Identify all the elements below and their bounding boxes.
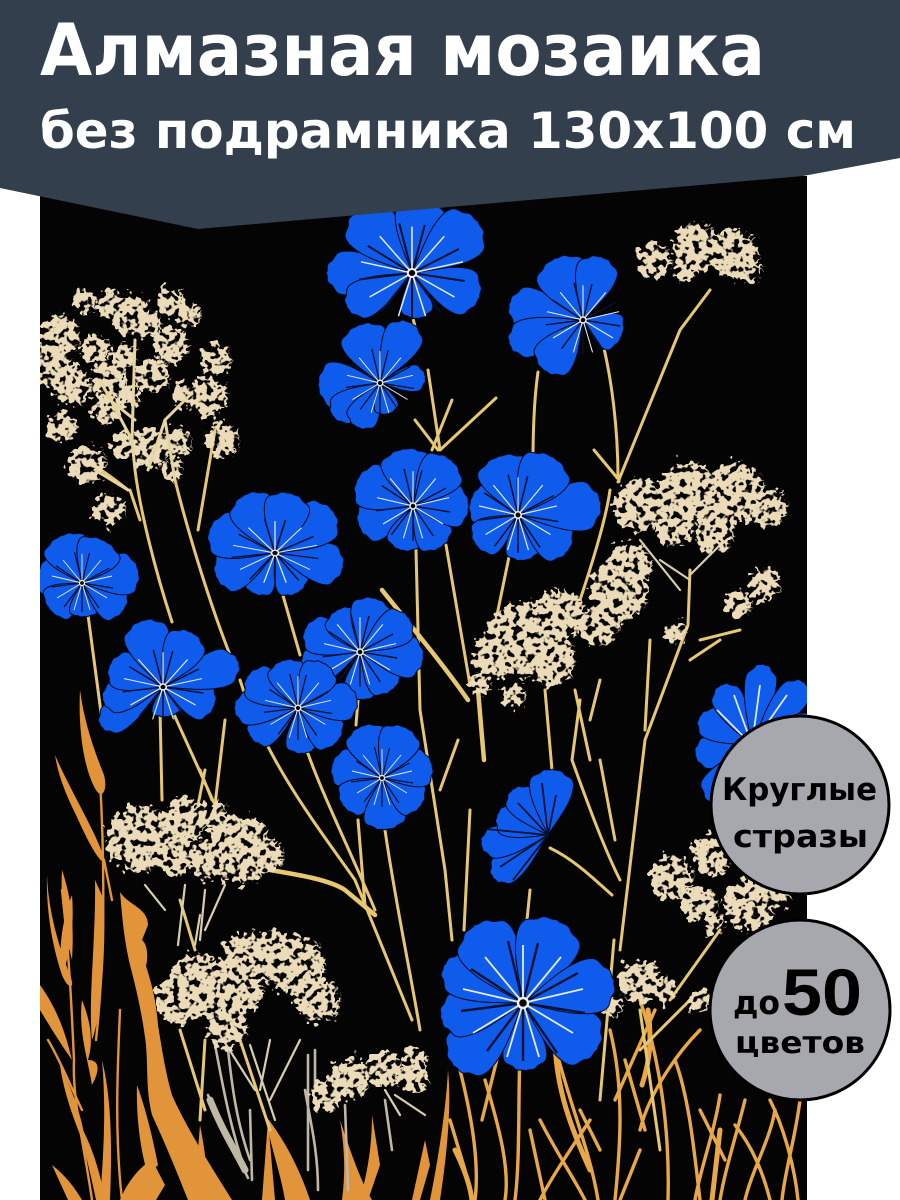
orange grass blades bbox=[40, 690, 449, 1200]
subtitle: без подрамника 130х100 см bbox=[40, 102, 856, 160]
blue flowers bbox=[33, 192, 825, 1086]
cream flower clusters bbox=[28, 224, 792, 1110]
badge: up to 50 colours: цветов bbox=[735, 1026, 865, 1061]
badge: up to 50 colours: 50 bbox=[782, 955, 862, 1029]
panel: artwork plants bbox=[28, 192, 825, 1200]
artwork: black painting background bbox=[40, 176, 807, 1200]
flower 5 bbox=[468, 452, 602, 562]
header banner bbox=[0, 0, 900, 229]
thin orange stems, left side bbox=[48, 780, 122, 1200]
badge: round rhinestones: Круглые bbox=[722, 772, 877, 808]
badge: round rhinestones bbox=[711, 716, 889, 894]
flower 12 bbox=[478, 768, 575, 891]
flower 3 bbox=[318, 320, 426, 430]
title: Алмазная мозаика bbox=[40, 8, 765, 92]
yellow stems bbox=[88, 290, 740, 1150]
flower 8 bbox=[98, 618, 240, 734]
flower 13 bbox=[440, 916, 616, 1076]
flower 7 bbox=[40, 532, 140, 621]
flower 4 bbox=[354, 448, 469, 552]
flower 1 bbox=[326, 208, 485, 320]
flower 6 bbox=[207, 491, 344, 596]
flower 9 bbox=[300, 596, 424, 700]
golden grass, right side bbox=[450, 1000, 800, 1200]
pale grey grass bbox=[208, 1045, 392, 1190]
cream stems inside top-left plant bbox=[95, 340, 190, 490]
badge: up to 50 colours bbox=[710, 920, 890, 1100]
badge: up to 50 colours: до bbox=[733, 983, 780, 1022]
flower 11 bbox=[330, 724, 434, 830]
flower 2 bbox=[508, 255, 624, 376]
flower 14 (right edge) bbox=[694, 663, 807, 802]
badge: round rhinestones: стразы bbox=[733, 819, 868, 855]
flower 10 bbox=[234, 654, 360, 756]
